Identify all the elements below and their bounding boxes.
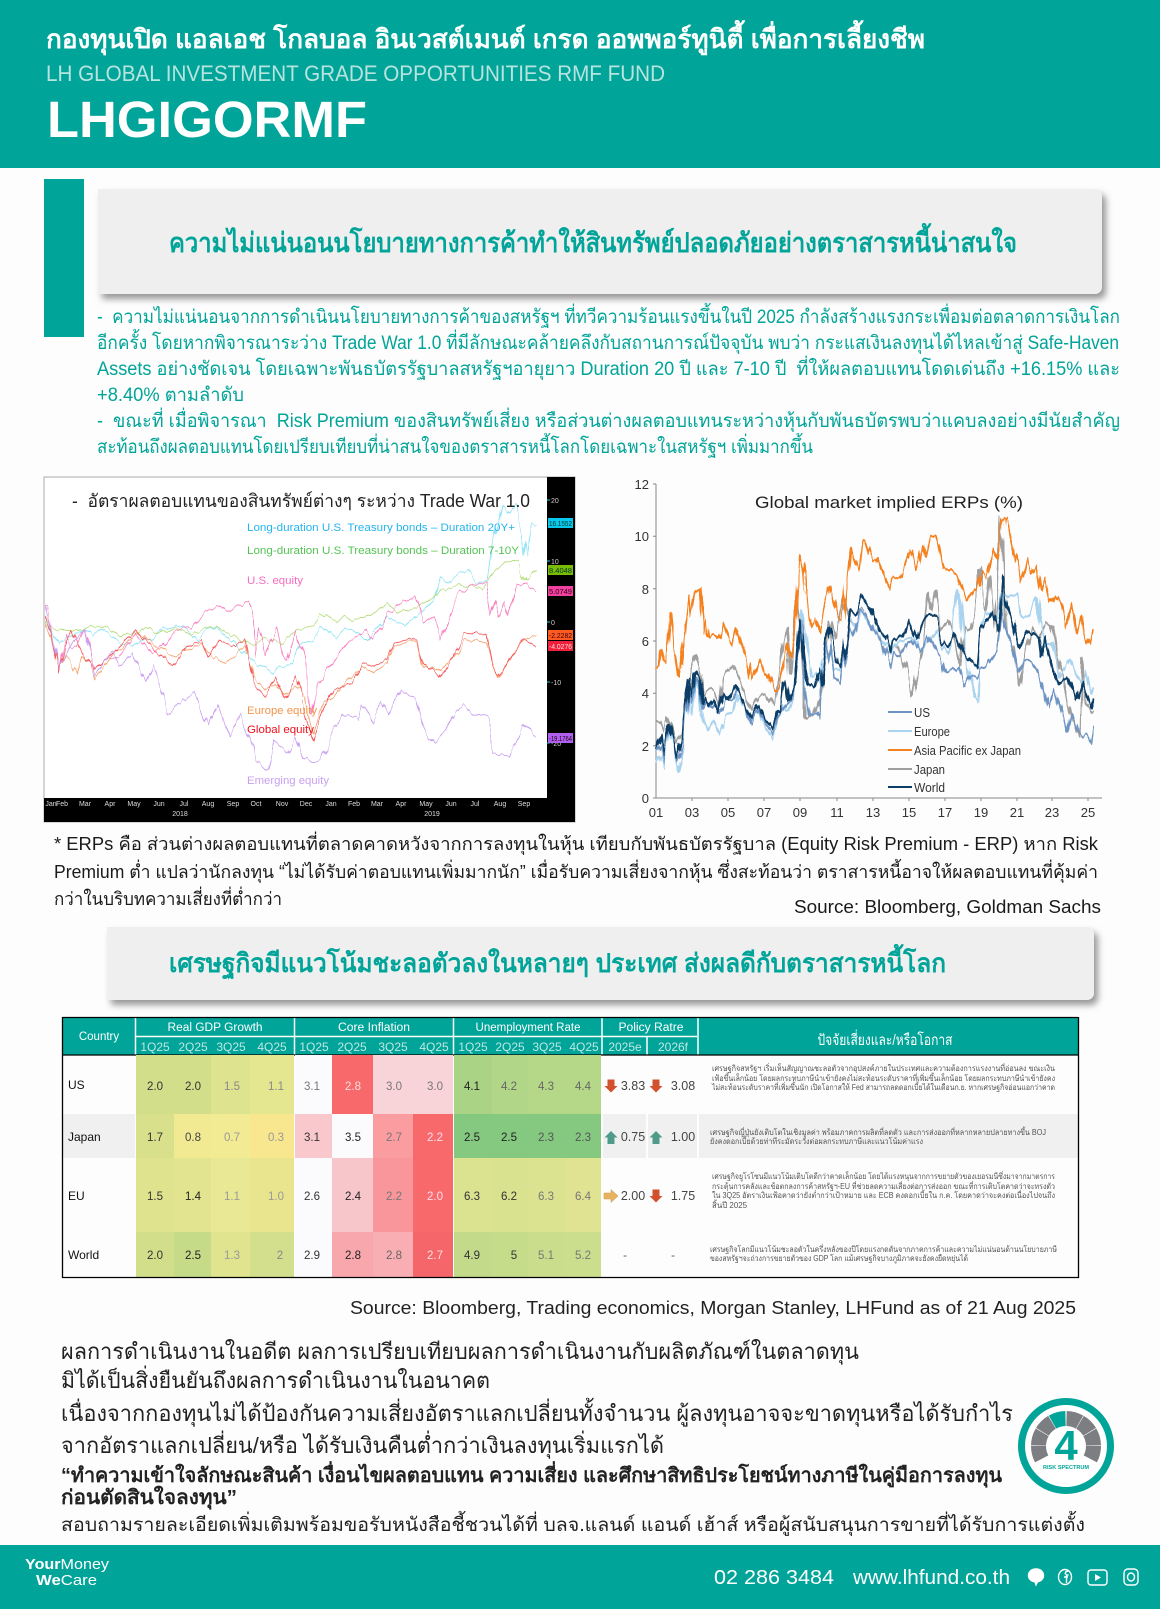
risk and opportunity commentary [710,1062,1057,1264]
time axis: 2019 [424,811,440,818]
time axis: Jan [325,801,337,808]
icon: risk spectrum badge [1022,1402,1110,1490]
table values: 2.5 [464,1132,480,1144]
series labels: Global equity [247,724,315,736]
line chart: global market implied ERPs: 25 [1081,805,1095,820]
table values: 0.3 [268,1132,284,1144]
table header [62,1017,1078,1055]
right axis and value tags: -19.1764 [549,736,572,743]
table values: 3.0 [386,1081,402,1093]
table header: 4Q25 [257,1040,287,1054]
chart legend [888,705,1021,795]
table header: 3Q25 [216,1040,246,1054]
table values: 1.3 [224,1250,240,1262]
line chart: global market implied ERPs: 4 [642,686,649,701]
table values: 0.75 [621,1130,645,1144]
table header: 2026f [658,1040,689,1054]
body paragraph: Assets อย่างชัดเจน โดยเฉพาะพันธบัตรรัฐบาลสหรัฐฯอายุยาว Duration 20 ปี และ 7-10 ปี ที่ให้ผลตอบแทนโดดเด่นถึง +16.15% และ [97,355,1120,381]
risk and opportunity commentary: เศรษฐกิจสหรัฐฯ เริ่มเห็นสัญญาณชะลอตัวจากอุปสงค์ภายในประเทศและความต้องการแรงงานที่อ่อนลง ขณะเงิน [712,1062,1055,1073]
table header: 4Q25 [569,1040,599,1054]
line chart: global market implied ERPs: 23 [1045,805,1059,820]
section heading 1 [98,189,1102,294]
table values: 2.7 [386,1132,402,1144]
table header: 1Q25 [140,1040,170,1054]
table values: 2.0 [147,1081,163,1093]
series labels: Europe equity [247,705,318,717]
risk and opportunity commentary: สิ้นปี 2025 [712,1199,748,1210]
right axis and value tags: 5.0749 [549,589,572,596]
table values: 1.0 [268,1191,284,1203]
time axis: Feb [348,801,360,808]
country labels [68,1078,101,1262]
chart legend: Europe [914,724,950,739]
disclaimer text: จากอัตราแลกเปลี่ยน/หรือ ได้รับเงินคืนต่ำกว่าเงินลงทุนเริ่มแรกได้ [61,1430,664,1459]
line chart: global market implied ERPs: 21 [1010,805,1024,820]
line chart: global market implied ERPs: 01 [649,805,663,820]
line chart: global market implied ERPs: 10 [635,529,649,544]
table values: 4.9 [464,1250,480,1262]
icon: policy rate down arrows [604,1080,662,1202]
table header: 2025e [608,1040,642,1054]
disclaimer text: เนื่องจากกองทุนไม่ได้ป้องกันความเสี่ยงอัตราแลกเปลี่ยนทั้งจำนวน ผู้ลงทุนอาจจะขาดทุนหรือได้รับกำไร [61,1398,1013,1427]
line chart: global market implied ERPs: 19 [974,805,988,820]
ERP footnote [54,831,1099,909]
table values: 1.5 [147,1191,163,1203]
disclaimer text: มิได้เป็นสิ่งยืนยันถึงผลการดำเนินงานในอนาคต [61,1365,490,1393]
icon: risk spectrum badge: RISK SPECTRUM [1043,1465,1089,1471]
body paragraph: สะท้อนถึงผลตอบแทนโดยเปรียบเทียบที่น่าสนใจของตราสารหนี้โลกโดยเฉพาะในสหรัฐฯ เพิ่มมากขึ้น [97,433,813,458]
table values: 4.2 [501,1081,517,1093]
right axis and value tags: -20 [551,741,561,748]
line chart: global market implied ERPs: 12 [635,477,649,492]
country labels: US [68,1078,85,1092]
time axis: Sep [518,801,530,808]
series labels: U.S. equity [247,575,304,587]
time axis: Aug [494,801,506,808]
chart legend: World [914,780,945,795]
icons: social media [1028,1569,1138,1585]
chart legend: Asia Pacific ex Japan [914,743,1021,758]
table values: 1.75 [671,1189,695,1203]
line chart: global market implied ERPs: 15 [902,805,916,820]
line chart: global market implied ERPs: 11 [830,805,844,820]
table values: 2.2 [386,1191,402,1203]
table values: 6.4 [575,1191,592,1203]
risk and opportunity commentary: เศรษฐกิจโลกมีแนวโน้มชะลอตัวในครึ่งหลังของปีโดยแรงกดดันจากภาคการค้าและความไม่แน่นอนด้านนโยบายภาษี [710,1243,1057,1254]
time axis: 2018 [172,811,188,818]
table values: 1.4 [185,1191,202,1203]
table values: 3.1 [304,1132,320,1144]
time axis: Apr [105,801,116,808]
risk and opportunity commentary: เศรษฐกิจญี่ปุ่นยังเติบโตในเชิงมูลค่า พร้อมภาคการผลิตที่ลดตัว และการส่งออกที่หลากหลายปลายทางขึ้น BOJ [710,1126,1046,1138]
table values: 2.8 [386,1250,402,1262]
table header: 2Q25 [337,1040,367,1054]
table values: 2.5 [185,1250,201,1262]
chart title: Global market implied ERPs (%) [755,493,1023,512]
chart legend: Japan [914,762,945,777]
heatmap: unemployment rate [454,1055,601,1277]
table values: 2.5 [501,1132,517,1144]
disclaimer text: สอบถามรายละเอียดเพิ่มเติมพร้อมขอรับหนังสือชี้ชวนได้ที่ บลจ.แลนด์ แอนด์ เฮ้าส์ หรือผู้สนับสนุนการขายที่ได้รับการแต่งตั้ง [61,1511,1085,1537]
table values: 1.00 [671,1130,695,1144]
line chart: global market implied ERPs: 0 [642,791,649,806]
table values: 2.7 [427,1250,443,1262]
body paragraph: +8.40% ตามลำดับ [97,385,244,406]
contact details [714,1567,1010,1589]
ERP footnote: * ERPs คือ ส่วนต่างผลตอบแทนที่ตลาดคาดหวังจากการลงทุนในหุ้น เทียบกับพันธบัตรรัฐบาล (Equity Risk Premium - ERP) หาก Risk [54,831,1099,855]
line chart: global market implied ERPs: 09 [793,805,807,820]
right axis and value tags: -2.2282 [549,633,572,640]
table values: 1.7 [147,1132,163,1144]
time axis: Feb [56,801,68,808]
disclaimer text: ผลการดำเนินงานในอดีต ผลการเปรียบเทียบผลการดำเนินงานกับผลิตภัณฑ์ในตลาดทุน [61,1339,859,1365]
line chart: global market implied ERPs: 2 [642,739,649,754]
country labels: World [68,1248,99,1262]
source note for charts: Source: Bloomberg, Goldman Sachs [794,897,1101,917]
table values: 4.1 [464,1081,480,1093]
icon: policy rate flat arrow [604,1190,618,1202]
table values: 2 [277,1250,283,1262]
table values: 2.3 [538,1132,554,1144]
right axis and value tags: -4.0276 [549,644,572,651]
table values: 5.2 [575,1250,591,1262]
table values: 2.0 [427,1191,443,1203]
table values: - [671,1250,675,1262]
icon: policy rate up arrows [604,1131,662,1144]
time axis: Jun [153,801,165,808]
table values: 3.5 [345,1132,361,1144]
risk and opportunity commentary: ใน 3Q25 อัตราเงินเฟ้อคาดว่ายังต่ำกว่าเป้าหมาย และ ECB คงดอกเบี้ยใน ก.ค. โดยคาดว่าจะคงต่อเนื่องไปจนถึง [712,1189,1055,1200]
time axis: Mar [79,801,92,808]
data series [656,518,1093,770]
table values: 0.7 [224,1132,240,1144]
table header: 3Q25 [378,1040,408,1054]
ERP footnote: Premium ต่ำ แปลว่านักลงทุน “ไม่ได้รับค่าตอบแทนเพิ่มมากนัก” เมื่อรับความเสี่ยงจากหุ้น ซึ่งสะท้อนว่า ตราสารหนี้อาจให้ผลตอบแทนที่คุ้มค่า [54,859,1098,883]
table values: 3.0 [427,1081,443,1093]
time axis: Apr [396,801,407,808]
line chart: asset returns during Trade War 1.0 [44,477,575,822]
disclaimer text [61,1339,1085,1537]
table values: 2.8 [345,1250,361,1262]
logo: YourMoney [25,1556,110,1573]
risk and opportunity commentary: ไม่สะท้อนระดับราคาที่เพิ่มขึ้นนัก เปิดโอกาสให้ Fed สามารถลดดอกเบี้ยได้ในเดือนก.ย. หากเศรษฐกิจอ่อนแอกว่าคาด [711,1081,1055,1092]
table values: 2.0 [185,1081,201,1093]
table values: 1.1 [224,1191,240,1203]
table values: 2.2 [427,1132,443,1144]
table values: 2.00 [621,1189,645,1203]
time axis: Jul [180,801,189,808]
ERP footnote: กว่าในบริบทความเสี่ยงที่ต่ำกว่า [54,886,282,909]
accent bar [44,179,84,337]
table values: 2.4 [345,1191,362,1203]
line chart: global market implied ERPs: 03 [685,805,699,820]
line chart: global market implied ERPs: 17 [938,805,952,820]
country labels: Japan [68,1130,101,1144]
time axis [45,801,530,818]
header banner [0,0,1160,168]
time axis: Dec [300,801,313,808]
chart legend: US [914,705,930,720]
country labels: EU [68,1189,85,1203]
heatmap: real GDP growth [136,1055,294,1277]
time axis: Oct [251,801,261,808]
logo: WeCare [36,1572,97,1589]
table values: 1.5 [224,1081,240,1093]
body paragraph [97,303,1120,458]
table values: 2.0 [147,1250,163,1262]
table header: Policy Ratre [618,1022,684,1034]
table values: 2.9 [304,1250,320,1262]
right axis and value tags: 20 [551,498,559,505]
time axis: May [127,801,141,808]
table header: 2Q25 [495,1040,525,1054]
risk and opportunity commentary: ยังคงดอกเบี้ยด้วยท่าทีระมัดระวังต่อผลกระทบภาษีและแนวโน้มค่าแรง [710,1135,923,1146]
table header: 4Q25 [419,1040,449,1054]
series labels: Emerging equity [247,775,330,787]
risk and opportunity commentary: เฟ้อขึ้นเล็กน้อย โดยผลกระทบภาษีนำเข้ายังคงไม่สะท้อนระดับราคาที่เพิ่มขึ้นเล็กน้อย โดยผลกระทบภาษีนำเข้ายังคง [712,1072,1055,1083]
contact details: 02 286 3484 [714,1567,834,1589]
table values: 2.3 [575,1132,591,1144]
table values: 6.3 [464,1191,480,1203]
risk and opportunity commentary: เศรษฐกิจยูโรโซนมีแนวโน้มเติบโตดีกว่าคาดเล็กน้อย โดยได้แรงหนุนจากการขยายตัวของเยอรมนีซึ่งมาจากมาตรการ [712,1170,1056,1182]
logo [25,1556,110,1589]
table header: Real GDP Growth [168,1022,262,1034]
table values: 6.3 [538,1191,554,1203]
right axis and value tags: -10 [551,680,561,687]
risk and opportunity commentary: กระตุ้นการคลังและข้อตกลงการค้าสหรัฐฯ-EU ที่ช่วยลดความเสี่ยงต่อการส่งออก ขณะที่การเติบโตคาดว่าจะทรงตัว [712,1180,1055,1191]
icon: risk spectrum badge: 4 [1054,1422,1078,1469]
table header: ปัจจัยเสี่ยงและ/หรือโอกาส [818,1029,952,1049]
table values: 6.2 [501,1191,517,1203]
series labels: Long-duration U.S. Treasury bonds – Duration 20Y+ [247,522,515,534]
right axis and value tags: 16.1552 [549,521,572,528]
section heading 2 [107,927,1094,1000]
section heading 2: เศรษฐกิจมีแนวโน้มชะลอตัวลงในหลายๆ ประเทศ ส่งผลดีกับตราสารหนี้โลก [169,943,946,981]
table values: 5 [511,1250,517,1262]
line chart: global market implied ERPs [635,477,1102,820]
right axis and value tags: 8.4048 [549,568,572,575]
source note for table: Source: Bloomberg, Trading economics, Morgan Stanley, LHFund as of 21 Aug 2025 [350,1298,1076,1318]
axes [653,484,1102,801]
line chart: global market implied ERPs: 8 [642,582,649,597]
line chart: global market implied ERPs: 6 [642,634,649,649]
table values: 3.08 [671,1079,695,1093]
table values [147,1079,695,1262]
line chart: global market implied ERPs: 05 [721,805,735,820]
time axis: Jun [445,801,457,808]
table header: Core Inflation [338,1022,410,1034]
time axis: Jan [45,801,57,808]
line chart: global market implied ERPs: 13 [866,805,880,820]
table header: 1Q25 [458,1040,488,1054]
contact details: www.lhfund.co.th [852,1567,1010,1589]
table header: 3Q25 [532,1040,562,1054]
table header: Country [79,1031,119,1043]
table values: 2.6 [304,1191,320,1203]
table header: 2Q25 [178,1040,208,1054]
table values: 4.3 [538,1081,554,1093]
table values: 4.4 [575,1081,592,1093]
footer bar [0,1545,1160,1609]
japan row shading [62,1114,1078,1158]
time axis: Jul [471,801,480,808]
chart title: - อัตราผลตอบแทนของสินทรัพย์ต่างๆ ระหว่าง Trade War 1.0 [72,491,530,511]
right axis and value tags: 10 [551,559,559,566]
table header: Unemployment Rate [476,1022,580,1034]
time axis: Mar [371,801,384,808]
body paragraph: - ขณะที่ เมื่อพิจารณา Risk Premium ของสินทรัพย์เสี่ยง หรือส่วนต่างผลตอบแทนระหว่างหุ้นกับพันธบัตรพบว่าแคบลงอย่างมีนัยสำคัญ [97,407,1120,433]
table values: 3.1 [304,1081,320,1093]
table header: 1Q25 [299,1040,329,1054]
time axis: May [419,801,433,808]
right axis and value tags: 0 [551,620,555,627]
fund code: LHGIGORMF [47,91,367,148]
right axis and value tags [547,498,573,748]
table values: 5.1 [538,1250,554,1262]
heatmap: core inflation [295,1055,453,1277]
disclaimer text: ก่อนตัดสินใจลงทุน” [61,1485,237,1510]
series labels: Long-duration U.S. Treasury bonds – Duration 7-10Y [247,545,520,557]
line chart: global market implied ERPs: 07 [757,805,771,820]
table values: 2.8 [345,1081,361,1093]
risk and opportunity commentary: ของสหรัฐฯจะถ่วงการขยายตัวของ GDP โลก แม้เศรษฐกิจบางภูมิภาคจะยังคงยืดหยุ่นได้ [710,1253,968,1264]
time axis: Aug [202,801,214,808]
section heading 1: ความไม่แน่นอนนโยบายทางการค้าทำให้สินทรัพย์ปลอดภัยอย่างตราสารหนี้น่าสนใจ [169,222,1017,258]
series labels [247,522,520,787]
table values: 1.1 [268,1081,284,1093]
time axis: Sep [227,801,239,808]
table values: - [623,1250,627,1262]
fund name in English: LH GLOBAL INVESTMENT GRADE OPPORTUNITIES RMF FUND [46,61,665,86]
disclaimer text: “ทำความเข้าใจลักษณะสินค้า เงื่อนไขผลตอบแทน ความเสี่ยง และศึกษาสิทธิประโยชน์ทางภาษีในคู่มือการลงทุน [61,1460,1002,1489]
table values: 0.8 [185,1132,201,1144]
time axis: Nov [276,801,289,808]
table values: 3.83 [621,1079,645,1093]
economic data table [62,1017,1078,1278]
fund name in Thai: กองทุนเปิด แอลเอช โกลบอล อินเวสต์เมนต์ เกรด ออพพอร์ทูนิตี้ เพื่อการเลี้ยงชีพ [46,19,925,56]
